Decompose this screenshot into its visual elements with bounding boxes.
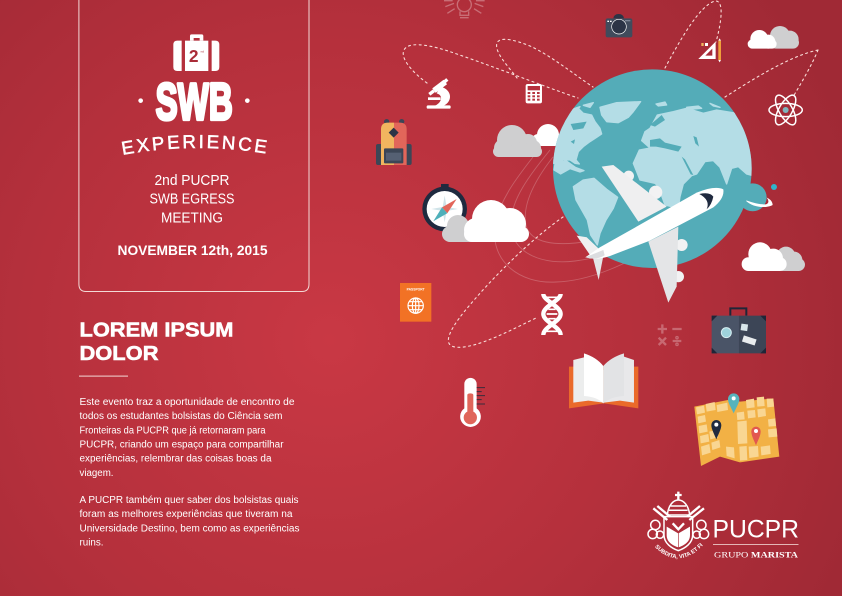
North America (548, 108, 602, 164)
body text: viagem. (80, 468, 114, 479)
icon: backpack (376, 119, 412, 165)
PUCPR crest (647, 492, 710, 560)
body text: todos os estudantes bolsistas do Ciência sem (80, 411, 282, 422)
engines (623, 171, 688, 282)
icon: set square and pencil (698, 38, 721, 62)
meeting title (150, 173, 234, 226)
icon: calculator (526, 84, 542, 103)
South America (573, 178, 618, 245)
body text: A PUCPR também quer saber dos bolsistas quais (80, 495, 299, 506)
icon: atom (769, 92, 802, 128)
icon: DNA (543, 294, 561, 335)
body text (80, 397, 300, 548)
body text: Este evento traz a oportunidade de encontro de (80, 397, 294, 408)
heading: DOLOR (80, 342, 159, 365)
icon: clouds lower right (742, 242, 805, 271)
meeting title: 2nd PUCPR (154, 173, 230, 189)
logo wordmark SWB: SWB (156, 74, 233, 132)
PUCPR wordmark: PUCPR (712, 515, 799, 543)
PUCPR crest: SUBDITA, VITA ET FIDES (655, 542, 703, 560)
icon: camera (606, 14, 632, 37)
dotted flight paths (403, 1, 818, 347)
orbit lines (494, 150, 668, 282)
icon: suitcase logo: nd (201, 50, 204, 54)
body text: Fronteiras da PUCPR que já retornaram para (80, 425, 266, 436)
icon: passport: PASSPORT (407, 287, 425, 291)
icon: open book (569, 353, 638, 408)
icon: microscope (427, 79, 451, 109)
globe (548, 69, 777, 268)
meeting title: SWB EGRESS (150, 192, 234, 208)
icon: light bulb (444, 0, 485, 18)
icon: clouds near compass (442, 200, 529, 242)
icon: suitcase (712, 308, 766, 353)
icon: suitcase logo: 2 (189, 46, 198, 66)
PUCPR wordmark (712, 515, 799, 559)
Eurasia and Africa (633, 108, 757, 208)
body text: Universidade Destino, bem como as experiências (80, 523, 300, 534)
icon: clouds top right (748, 26, 799, 49)
Central America (554, 161, 584, 174)
heading: LOREM IPSUM (80, 319, 233, 342)
body text: PUCPR, criando um espaço para compartilhar (80, 440, 284, 450)
heading (80, 319, 233, 365)
icon: suitcase logo (173, 34, 219, 71)
icon: clouds near globe (493, 124, 564, 157)
logo wordmark SWB (138, 74, 250, 132)
logo wordmark EXPERIENCE: EXPERIENCE (122, 134, 267, 155)
small planet (739, 183, 777, 211)
event panel (78, 0, 310, 292)
body text: experiências, relembrar das coisas boas da (80, 454, 272, 465)
icon: math symbols (658, 324, 682, 345)
PUCPR wordmark: GRUPO MARISTA (714, 549, 799, 559)
body text: foram as melhores experiências que tiveram na (80, 509, 293, 520)
icon: folded map (694, 393, 779, 466)
meeting title: MEETING (161, 210, 223, 226)
icon: compass (422, 184, 467, 231)
body text: ruins. (80, 538, 104, 548)
icon: thermometer (460, 378, 485, 427)
event date: NOVEMBER 12th, 2015 (118, 243, 268, 259)
Greenland (600, 102, 641, 123)
icon: passport (400, 283, 431, 322)
airplane (577, 165, 723, 303)
